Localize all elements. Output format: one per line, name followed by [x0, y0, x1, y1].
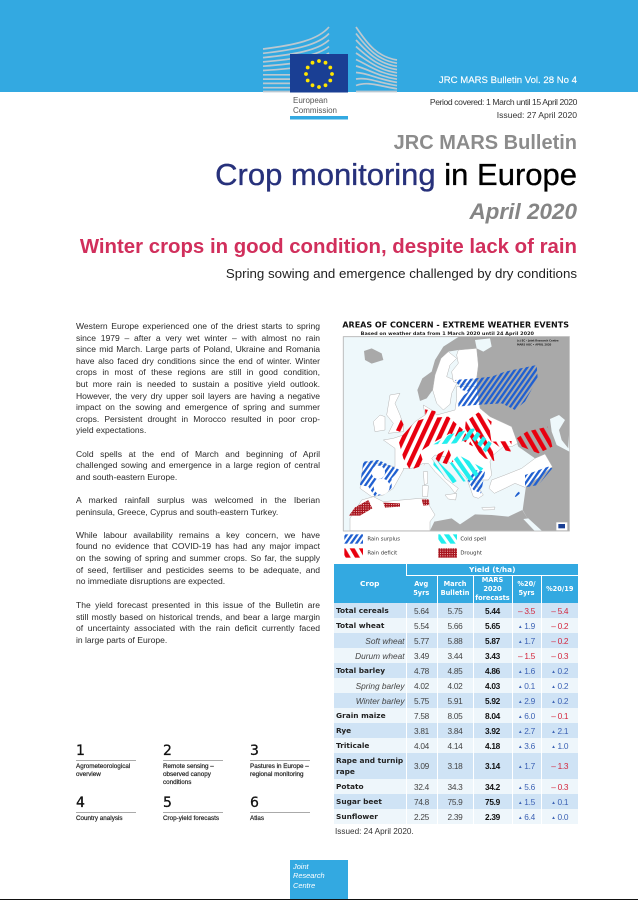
row: total barley: ▲1.6 — [518, 666, 535, 676]
text: found no evidence that COVID-19 has had any major impact — [76, 541, 320, 551]
legend: Drought — [460, 551, 482, 557]
contents: section 3: Pastures in Europe – — [250, 763, 309, 770]
row: sugar beet: 75.9 — [448, 797, 462, 807]
table note: Issued: 24 April 2020. — [335, 827, 414, 836]
issue month: April 2020 — [469, 199, 577, 224]
row: triticale: Triticale — [336, 741, 369, 750]
row: soft wheat: 5.88 — [448, 636, 462, 646]
issue date: Issued: 27 April 2020 — [497, 110, 577, 120]
row: durum wheat — [334, 648, 578, 663]
row: durum wheat: 3.44 — [448, 651, 462, 661]
yield forecast table: %20/ — [517, 580, 536, 588]
contents: section 2: conditions — [163, 779, 191, 786]
row: rye — [334, 723, 578, 738]
row: total wheat: – 0.2 — [551, 621, 568, 631]
row: potato: 34.2 — [485, 782, 500, 792]
row: grain maize: Grain maize — [336, 711, 386, 720]
row: sunflower — [334, 809, 578, 824]
text: However, the very dry upper soil layers are having a negative — [76, 391, 320, 401]
row: grain maize: 7.58 — [414, 711, 429, 721]
row: durum wheat: – 1.5 — [518, 651, 535, 661]
text: Western Europe experienced one of the driest starts to spring — [76, 321, 320, 331]
text: since mid March. Large parts of Poland, Ukraine and Romania — [76, 344, 320, 354]
period covered: Period covered: 1 March until 15 April 2020 — [430, 97, 577, 107]
row: total cereals: – 5.4 — [551, 606, 568, 616]
contents: section 3: 3 — [250, 743, 259, 759]
row: spring barley: Spring barley — [356, 681, 404, 691]
row: potato: – 0.3 — [551, 782, 568, 792]
text: yield expectations. — [76, 425, 146, 435]
contents: section 2: observed canopy — [163, 771, 211, 778]
row: soft wheat: 5.87 — [485, 636, 500, 646]
row: soft wheat: ▲1.7 — [518, 636, 535, 646]
text: on the sowing of spring and summer crops. So far, the supply — [76, 553, 320, 563]
row: triticale — [334, 738, 578, 753]
yield forecast table: forecasts — [475, 594, 510, 602]
map credit — [517, 338, 559, 346]
row: durum wheat: Durum wheat — [355, 651, 404, 661]
text: challenged sowing and emergence in a large region of central — [76, 460, 320, 470]
contents: section 5 — [163, 795, 223, 822]
row: sunflower: 2.39 — [448, 812, 462, 822]
text: impact on the sowing and emergence of spring and summer — [76, 402, 320, 412]
text: no immediate disruptions are expected. — [76, 576, 225, 586]
legend: Rain deficit — [367, 551, 397, 557]
row: durum wheat: 3.49 — [414, 651, 429, 661]
yield forecast table: MARS — [482, 576, 503, 584]
row: sunflower: 2.39 — [485, 812, 500, 822]
contents: section 2: Remote sensing – — [163, 763, 214, 770]
map base — [343, 337, 569, 531]
text: still mostly based on historical trends, and bear a large margin — [76, 612, 320, 622]
icon: Berlaymont building — [263, 27, 397, 92]
yield forecast table: Bulletin — [441, 589, 469, 597]
row: triticale: 4.04 — [414, 741, 429, 751]
text: crops. Persistent drought in Morocco resulted in poor crop- — [76, 414, 320, 424]
Joint Research Centre box: Joint — [293, 862, 309, 871]
contents: section 1: overview — [76, 771, 101, 778]
row: potato: 34.3 — [448, 782, 462, 792]
row: sunflower: 2.25 — [414, 812, 429, 822]
row: total cereals — [334, 603, 578, 618]
areas of rain deficit — [395, 409, 552, 470]
yield forecast table: Yield (t/ha) — [469, 565, 516, 574]
areas of rain surplus — [360, 365, 552, 497]
row: total cereals: 5.44 — [485, 606, 500, 616]
row: potato — [334, 779, 578, 794]
yield forecast table: 5yrs — [413, 589, 429, 597]
row: total barley: 4.86 — [485, 666, 500, 676]
row: spring barley: ▲0.2 — [551, 681, 568, 691]
areas of cold spell — [433, 428, 492, 484]
row: rye: ▲2.1 — [551, 726, 568, 736]
Joint Research Centre box — [290, 860, 348, 899]
map credit: (c) EC - Joint Research Centre — [517, 338, 559, 342]
yield forecast table: %20/19 — [546, 585, 573, 593]
yield forecast table: 2020 — [483, 585, 502, 593]
icon: EU flag — [290, 54, 348, 92]
row: spring barley: 4.02 — [448, 681, 462, 691]
row: rye: 3.92 — [485, 726, 500, 736]
row: total barley: 4.85 — [448, 666, 462, 676]
yield forecast table: March — [444, 580, 466, 588]
text: The yield forecast presented in this issue of the Bulletin are — [76, 600, 320, 610]
row: durum wheat: 3.43 — [485, 651, 500, 661]
contents: section 4 — [76, 795, 136, 822]
row: spring barley — [334, 678, 578, 693]
contents: section 1: 1 — [76, 743, 85, 759]
row: rape and turnip rape: rape — [336, 767, 355, 776]
row: total barley: 4.78 — [414, 666, 429, 676]
row: sugar beet: 74.8 — [414, 797, 429, 807]
row: winter barley: 5.92 — [485, 696, 500, 706]
contents: section 1 — [76, 743, 136, 778]
row: winter barley — [334, 693, 578, 708]
row: soft wheat: – 0.2 — [551, 636, 568, 646]
row: total cereals: – 3.5 — [518, 606, 535, 616]
row: triticale: ▲3.6 — [518, 741, 535, 751]
row: rye: ▲2.7 — [518, 726, 535, 736]
bulletin name: JRC MARS Bulletin — [394, 132, 577, 154]
text: of seed, fertiliser and pesticides seems to be adequate, and — [76, 564, 320, 574]
row: spring barley: 4.02 — [414, 681, 429, 691]
row: total barley: Total barley — [336, 666, 385, 675]
row: triticale: 4.18 — [485, 741, 500, 751]
Joint Research Centre box: Centre — [293, 881, 315, 890]
text: crops in most of these regions are still in good condition, — [76, 367, 320, 377]
text: have also faced dry conditions since the end of winter. Winter — [76, 356, 320, 366]
logo wordmark: European — [293, 96, 328, 105]
row: sunflower: Sunflower — [336, 812, 378, 821]
contents: section 2: 2 — [163, 743, 172, 759]
row: total cereals: Total cereals — [336, 606, 389, 615]
contents: section 5: 5 — [163, 795, 172, 811]
row: sugar beet: Sugar beet — [336, 797, 382, 806]
text: but more rain is needed to sustain a positive yield outlook. — [76, 379, 320, 389]
text: A marked rainfall surplus was welcomed in the Iberian — [76, 495, 320, 505]
row: total barley: ▲0.2 — [551, 666, 568, 676]
row: rape and turnip rape: 3.09 — [414, 761, 429, 771]
row: total cereals: 5.75 — [448, 606, 462, 616]
yield forecast table — [334, 564, 578, 824]
row: sugar beet: ▲0.1 — [551, 797, 568, 807]
contents: section 3: regional monitoring — [250, 771, 304, 778]
icon: EC logo — [556, 522, 567, 530]
row: rape and turnip rape: ▲1.7 — [518, 761, 535, 771]
row: spring barley: 4.03 — [485, 681, 500, 691]
row: rye: 3.81 — [414, 726, 429, 736]
contents: section 3 — [250, 743, 310, 778]
text: of uncertainty associated with the rain deficit currently faced — [76, 623, 320, 633]
row: sunflower: ▲6.4 — [518, 812, 535, 822]
contents: section 4: 4 — [76, 795, 85, 811]
text: in large parts of Europe. — [76, 635, 167, 645]
row: rape and turnip rape: 3.18 — [448, 761, 462, 771]
row: triticale: ▲1.0 — [551, 741, 568, 751]
text: While labour availability remains a key concern, we have — [76, 530, 320, 540]
headline: Winter crops in good condition, despite lack of rain — [80, 236, 577, 258]
legend — [344, 534, 486, 558]
text: and south-eastern Europe. — [76, 472, 177, 482]
row: triticale: 4.14 — [448, 741, 462, 751]
European Commission logo — [262, 26, 398, 120]
subheadline: Spring sowing and emergence challenged by dry conditions — [226, 266, 577, 281]
header band — [0, 0, 638, 92]
contents: section 6 — [250, 795, 310, 822]
row: total wheat: Total wheat — [336, 621, 384, 630]
row: grain maize: 8.05 — [448, 711, 462, 721]
yield forecast table: 5yrs — [518, 589, 535, 597]
row: rape and turnip rape: Rape and turnip — [336, 756, 403, 765]
row: total wheat: 5.65 — [485, 621, 500, 631]
row: grain maize: ▲6.0 — [518, 711, 535, 721]
title: Crop monitoring in Europe — [215, 157, 577, 192]
row: rape and turnip rape: 3.14 — [485, 761, 500, 771]
row: rye: 3.84 — [448, 726, 462, 736]
bulletin volume: JRC MARS Bulletin Vol. 28 No 4 — [439, 75, 577, 86]
row: winter barley: 5.75 — [414, 696, 429, 706]
row: total barley — [334, 663, 578, 678]
contents: section 1: Agrometeorological — [76, 763, 130, 770]
row: potato: Potato — [336, 782, 364, 791]
yield forecast table: Crop — [360, 579, 379, 588]
row: soft wheat — [334, 633, 578, 648]
row: grain maize: – 0.1 — [551, 711, 568, 721]
row: potato: 32.4 — [414, 782, 429, 792]
contents: section 4: Country analysis — [76, 815, 123, 822]
yield forecast table: Avg — [414, 580, 428, 588]
row: sugar beet: 75.9 — [485, 797, 500, 807]
row: winter barley: ▲0.2 — [551, 696, 568, 706]
areas of drought — [349, 499, 429, 516]
row: grain maize: 8.04 — [485, 711, 500, 721]
body text — [76, 321, 320, 645]
row: spring barley: ▲0.1 — [518, 681, 535, 691]
row: total wheat — [334, 618, 578, 633]
row: soft wheat: Soft wheat — [365, 636, 404, 646]
row: soft wheat: 5.77 — [414, 636, 429, 646]
row: sugar beet: ▲1.5 — [518, 797, 535, 807]
row: winter barley: ▲2.9 — [518, 696, 535, 706]
row: total wheat: 5.54 — [414, 621, 429, 631]
contents: section 6: Atlas — [250, 815, 264, 822]
contents: section 5: Crop-yield forecasts — [163, 815, 219, 822]
row: rye: Rye — [336, 726, 351, 735]
row: sunflower: ▲0.0 — [551, 812, 568, 822]
map title: AREAS OF CONCERN - EXTREME WEATHER EVENTS — [342, 321, 569, 330]
row: total cereals: 5.64 — [414, 606, 429, 616]
text: Cold spells at the end of March and beginning of April — [76, 449, 320, 459]
legend: Rain surplus — [367, 537, 400, 543]
Joint Research Centre box: Research — [293, 871, 325, 880]
row: potato: ▲5.6 — [518, 782, 535, 792]
logo wordmark — [293, 96, 337, 115]
map: areas of concern — [342, 321, 570, 558]
contents: section 2 — [163, 743, 223, 786]
row: total wheat: ▲1.9 — [518, 621, 535, 631]
row: rape and turnip rape: – 1.3 — [551, 761, 568, 771]
row: winter barley: Winter barley — [356, 696, 404, 706]
contents: section 6: 6 — [250, 795, 259, 811]
logo wordmark: Commission — [293, 106, 337, 115]
row: total wheat: 5.66 — [448, 621, 462, 631]
legend: Cold spell — [460, 536, 486, 542]
row: rape and turnip rape — [334, 753, 578, 779]
row: sugar beet — [334, 794, 578, 809]
row: durum wheat: – 0.3 — [551, 651, 568, 661]
map subtitle: Based on weather data from 1 March 2020 until 24 April 2020 — [361, 331, 535, 337]
row: grain maize — [334, 708, 578, 723]
map credit: MARS AOC • APRIL 2020 — [517, 342, 552, 346]
text: since 1979 – after a very wet winter – with almost no rain — [76, 333, 320, 343]
row: winter barley: 5.91 — [448, 696, 462, 706]
text: peninsula, Greece, Cyprus and south-eastern Turkey. — [76, 507, 278, 517]
